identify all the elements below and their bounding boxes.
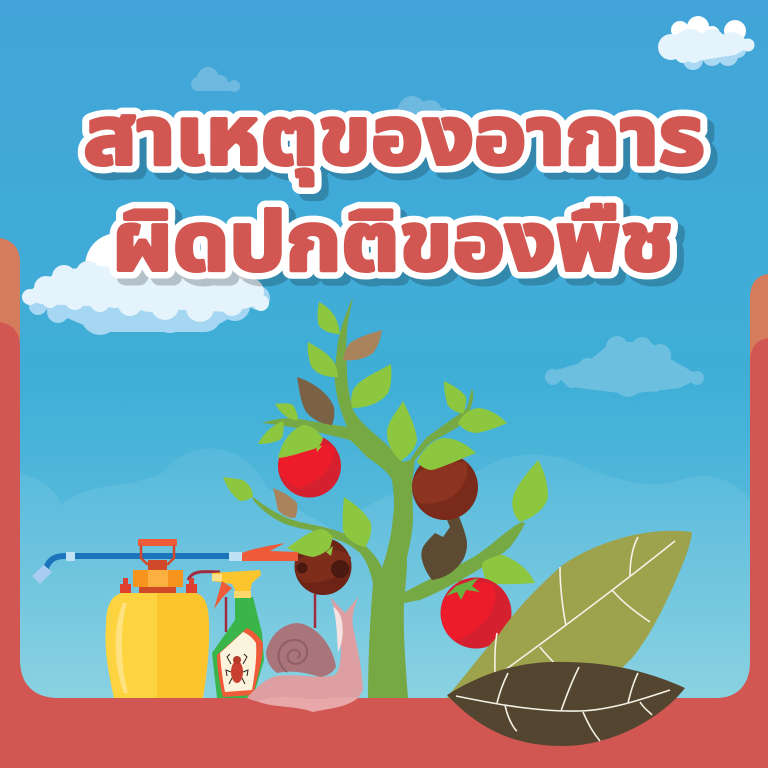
cloud: top right [658,16,754,70]
cloud: right mid faded [545,336,704,397]
plant stem and branches [253,297,525,698]
snail [247,594,363,712]
rotten tomato centre [412,438,478,520]
background hazy cloud banks [0,449,750,700]
rotten tomato with spots [287,529,352,595]
sprayer handle [138,539,177,572]
title [83,91,712,295]
sprayer [32,539,298,698]
insecticide spray bottle [212,570,264,698]
title white outline: ผิดปกติของพืช [112,197,674,288]
sprayer cap [120,570,197,593]
title text: ผิดปกติของพืช [112,197,674,288]
cloud: small faded top [191,67,240,92]
frame: red border [0,322,768,768]
red tomato lower right [440,576,512,648]
large olive leaf [447,531,692,710]
bug icon [226,654,248,684]
sprayer hose [188,572,220,580]
healthy leaves [223,302,548,584]
title shadow [90,98,712,295]
eaten dark leaf [421,505,467,580]
snail eye stalk to rotten fruit [314,594,316,628]
plant [223,297,548,698]
frame: left tab [0,238,20,340]
title white outline: สาเหตุของอาการ [83,91,705,185]
sprayer yellow tank [105,593,209,698]
snail body [247,596,363,712]
red tomato upper left [278,425,341,498]
title shadow: สาเหตุของอาการ [90,98,712,192]
title white outline [83,91,705,288]
title shadow: ผิดปกติของพืช [119,204,681,295]
snail shell [266,623,336,677]
cloud: left large [22,233,270,335]
cloud: faded behind title [392,96,446,128]
sprayer wand [32,543,298,584]
diseased brown leaves [273,330,382,518]
frame: right tab [750,274,768,360]
title text [83,91,705,288]
dark diseased leaf [447,662,685,746]
title text: สาเหตุของอาการ [83,91,705,185]
